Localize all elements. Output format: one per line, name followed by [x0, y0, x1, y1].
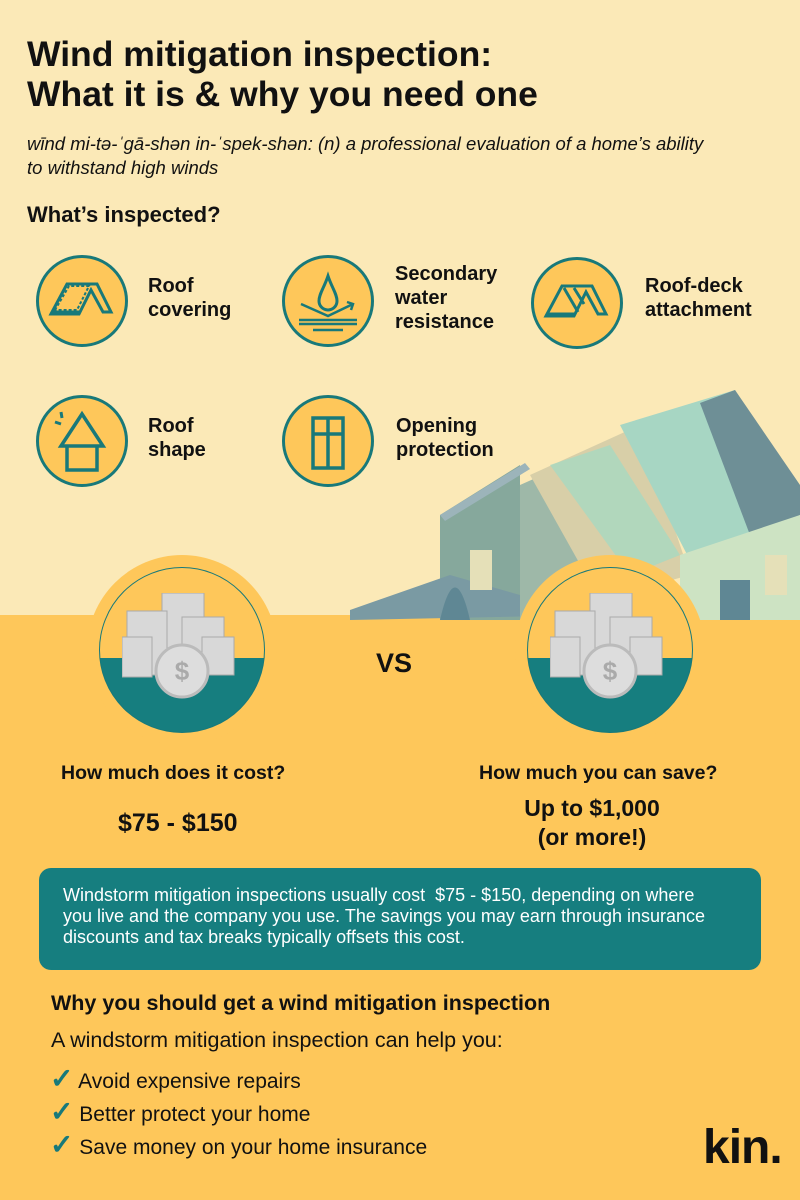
icon: roof-deck attachment [531, 257, 623, 349]
checklist [50, 1063, 427, 1160]
label: roof shape: shape [148, 439, 206, 461]
label: roof-deck attachment [645, 275, 752, 321]
savings value: Up to $1,000 [524, 795, 660, 821]
savings heading: How much you can save? [479, 762, 717, 784]
illustration: house [350, 390, 800, 620]
definition [27, 133, 704, 178]
icon: roof covering [36, 255, 128, 347]
label: opening protection: protection [396, 439, 494, 461]
label: roof-deck attachment: attachment [645, 299, 752, 321]
checklist: ✓ Better protect your home [50, 1096, 310, 1127]
icon: secondary water resistance [282, 255, 374, 347]
yellow lower background [0, 615, 800, 1200]
intro text: A windstorm mitigation inspection can help you: [51, 1028, 503, 1052]
label: opening protection [396, 415, 494, 461]
label: roof shape: Roof [148, 415, 194, 437]
label: secondary water resistance: Secondary [395, 263, 497, 285]
label: roof covering: covering [148, 299, 231, 321]
callout: cost explanation: you live and the company you use. The savings you may earn through insurance [63, 906, 705, 926]
icon: roof shape [36, 395, 128, 487]
panel: cost coin graphic [94, 555, 270, 733]
callout: cost explanation [39, 868, 761, 970]
panel: cost coin graphic: $ [175, 656, 190, 686]
title [27, 34, 538, 114]
savings value [524, 795, 660, 850]
checklist: ✓ Save money on your home insurance [50, 1129, 427, 1160]
label: secondary water resistance: water [395, 287, 447, 309]
icon: opening protection [282, 395, 374, 487]
label: secondary water resistance: resistance [395, 311, 494, 333]
definition: to withstand high winds [27, 157, 218, 178]
callout: cost explanation: discounts and tax breaks typically offsets this cost. [63, 927, 465, 947]
title: Wind mitigation inspection: [27, 34, 492, 74]
label: roof covering [148, 275, 231, 321]
heading: why: Why you should get a wind mitigation inspection [51, 991, 550, 1015]
heading: what's inspected: What’s inspected? [27, 202, 221, 227]
logo: kin.: kin. [703, 1121, 782, 1174]
checklist: ✓ Avoid expensive repairs [50, 1063, 301, 1094]
panel: savings coin graphic: $ [603, 656, 618, 686]
panel: savings coin graphic [520, 555, 700, 733]
savings value: (or more!) [538, 824, 646, 850]
label: roof-deck attachment: Roof-deck [645, 275, 743, 297]
label: roof shape [148, 415, 206, 461]
label: opening protection: Opening [396, 415, 477, 437]
cost value: $75 - $150 [118, 809, 238, 837]
VS text: VS [376, 648, 412, 678]
title: What it is & why you need one [27, 74, 538, 114]
label: secondary water resistance [395, 263, 498, 333]
cost heading: How much does it cost? [61, 762, 285, 784]
callout: cost explanation: Windstorm mitigation inspections usually cost $75 - $150, depending on where [63, 885, 694, 905]
label: roof covering: Roof [148, 275, 194, 297]
definition: wīnd mi-tə-ˈgā-shən in-ˈspek-shən: (n) a professional evaluation of a home’s ability [27, 133, 703, 154]
